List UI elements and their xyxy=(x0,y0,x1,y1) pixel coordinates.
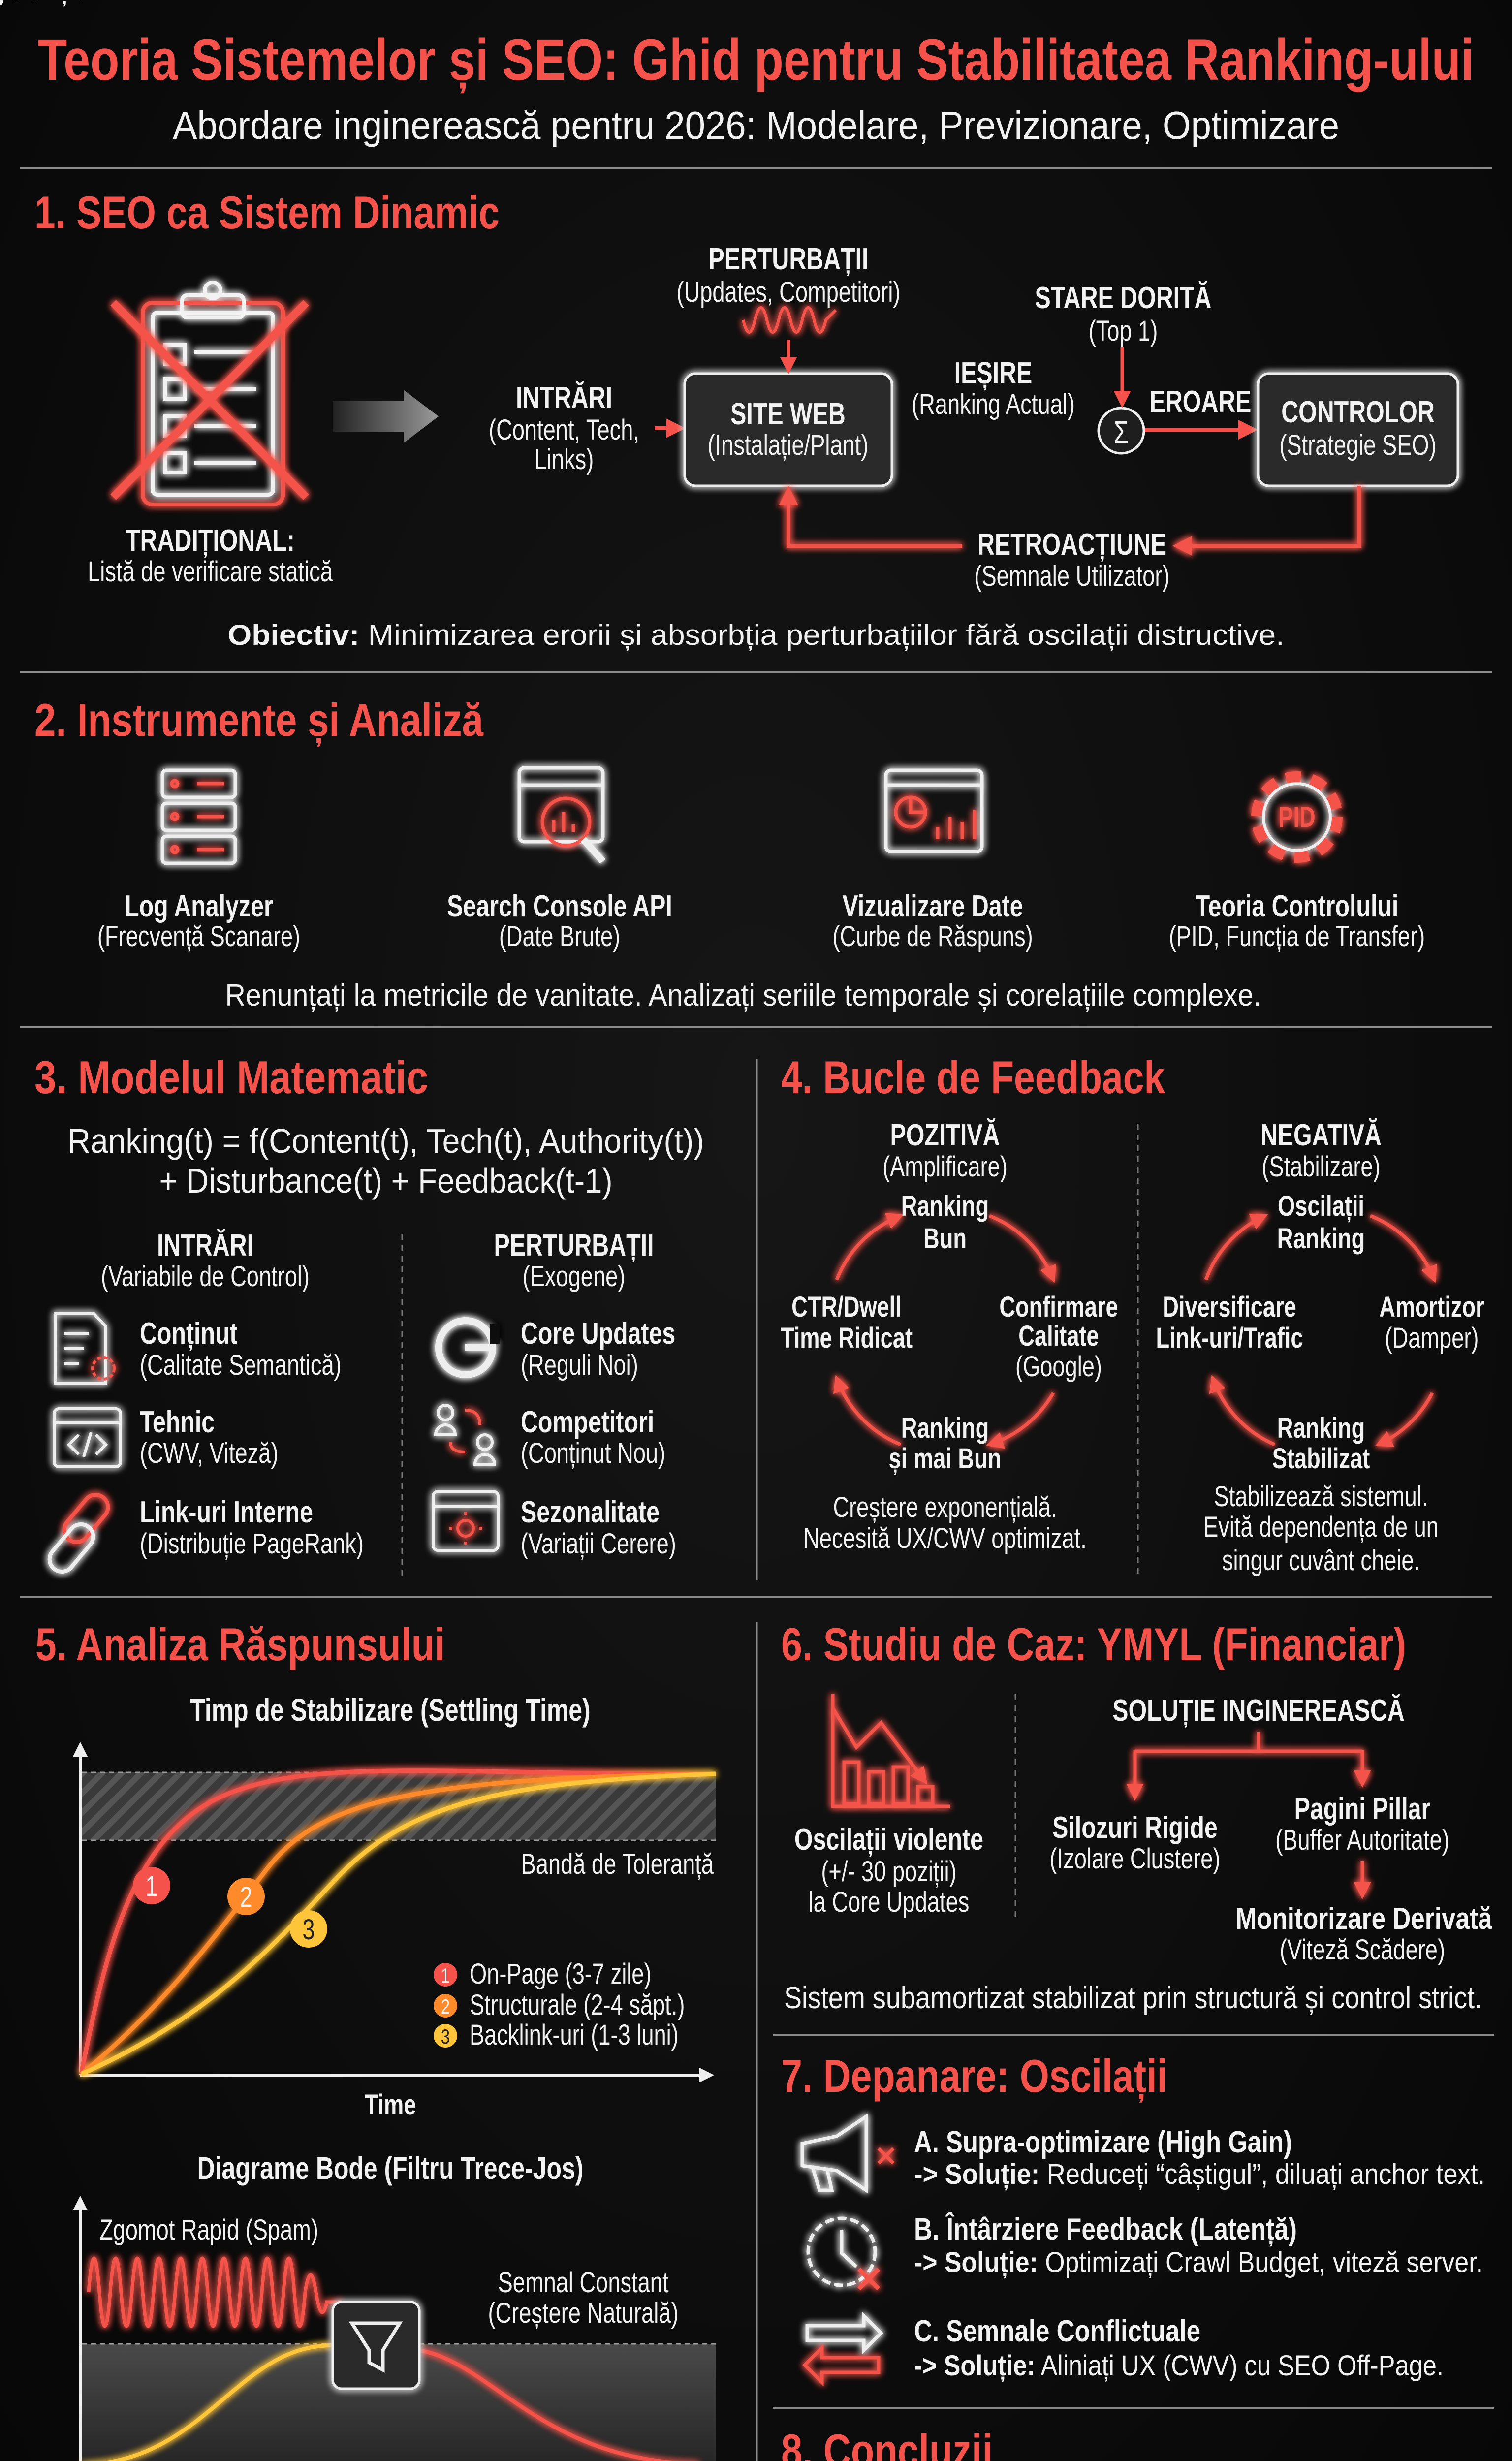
section 2 heading: 2. Instrumente și Analiză xyxy=(34,694,484,747)
panel: case study YMYL: (Viteză Scădere) xyxy=(1280,1934,1445,1966)
chart: bode diagram xyxy=(80,2151,716,2461)
negative loop: (Damper) xyxy=(1385,1323,1479,1354)
inputs column: INTRĂRI xyxy=(157,1228,253,1262)
inputs label: (Content, Tech, xyxy=(489,414,639,446)
negative loop: Stabilizează sistemul. xyxy=(1214,1481,1428,1513)
panel: debugging oscillations: C. Semnale Conflictuale xyxy=(914,2314,1200,2348)
inputs column: Conținut xyxy=(140,1316,238,1351)
positive loop: Creștere exponențială. xyxy=(833,1492,1057,1523)
chart: settling time: Backlink-uri (1-3 luni) xyxy=(470,2019,679,2051)
tool labels: Search Console API xyxy=(447,889,672,923)
feedback path: RETROACȚIUNE xyxy=(977,527,1166,562)
chart: bode diagram: Semnal Constant xyxy=(498,2267,669,2299)
positive loop: Ranking xyxy=(901,1191,989,1222)
positive loop: și mai Bun xyxy=(889,1443,1001,1475)
panel: case study YMYL: Oscilații violente xyxy=(794,1822,983,1857)
label: traditional: Listă de verificare statică xyxy=(88,556,333,588)
chart: settling time: On-Page (3-7 zile) xyxy=(470,1958,652,1990)
chart: settling time: Structurale (2-4 săpt.) xyxy=(470,1989,685,2021)
inputs column: (Variabile de Control) xyxy=(101,1261,310,1293)
inputs column xyxy=(44,1228,364,1577)
positive loop: Necesită UX/CWV optimizat. xyxy=(803,1523,1087,1554)
output: (Ranking Actual) xyxy=(912,389,1075,420)
icon: crossed clipboard xyxy=(113,283,306,505)
chart: settling time: 1 xyxy=(441,1964,450,1987)
disturbances column: Sezonalitate xyxy=(521,1495,660,1529)
box: site web: (Instalație/Plant) xyxy=(708,430,868,461)
panel: case study YMYL xyxy=(781,1618,1492,2015)
chart: settling time: 3 xyxy=(441,2025,450,2048)
label: traditional: TRADIȚIONAL: xyxy=(126,523,295,558)
chart: bode diagram: Diagrame Bode (Filtru Trece-Jos) xyxy=(197,2151,583,2186)
panel: feedback loops xyxy=(781,1051,1484,1578)
desired state: STARE DORITĂ xyxy=(1035,281,1211,315)
sum node xyxy=(1099,408,1144,453)
subtitle: Abordare inginerească pentru 2026: Modelare, Previzionare, Optimizare xyxy=(173,103,1339,147)
positive loop: (Google) xyxy=(1015,1351,1102,1383)
panel: case study YMYL: Pagini Pillar xyxy=(1294,1792,1430,1826)
output xyxy=(892,356,1094,430)
panel: response analysis xyxy=(0,0,716,2461)
diagram: control loop xyxy=(489,242,1458,592)
chart: settling time: 1 xyxy=(145,1871,158,1902)
tool labels: (Date Brute) xyxy=(499,921,620,952)
chart: settling time: Time xyxy=(365,2089,416,2121)
panel: response analysis: 5. Analiza Răspunsului xyxy=(35,1618,445,1670)
arrow: gray transition xyxy=(333,390,439,443)
output: IEȘIRE xyxy=(954,356,1032,390)
box: site web xyxy=(685,374,892,486)
feedback path: (Semnale Utilizator) xyxy=(974,561,1170,592)
panel: case study YMYL: la Core Updates xyxy=(809,1887,969,1918)
inputs column: (Distribuție PageRank) xyxy=(140,1528,364,1560)
inputs column: (CWV, Viteză) xyxy=(140,1438,279,1469)
inputs column: (Calitate Semantică) xyxy=(140,1350,342,1381)
panel: case study YMYL: Silozuri Rigide xyxy=(1052,1810,1218,1844)
objective text: Obiectiv: Minimizarea erorii și absorbția perturbațiilor fără oscilații distructive. xyxy=(227,619,1285,651)
disturbances: (Updates, Competitori) xyxy=(677,277,900,308)
icon: log analyzer xyxy=(162,770,235,863)
tool labels: Log Analyzer xyxy=(125,889,273,923)
chart: settling time: 2 xyxy=(441,1995,450,2018)
positive loop: Time Ridicat xyxy=(781,1323,913,1354)
tool labels: (Frecvență Scanare) xyxy=(97,921,300,952)
panel: debugging oscillations: -> Soluție: Aliniați UX (CWV) cu SEO Off-Page. xyxy=(914,2350,1444,2382)
panel: mathematical model: 3. Modelul Matematic xyxy=(34,1051,428,1103)
tool labels xyxy=(97,889,1425,952)
chart: settling time: 3 xyxy=(302,1914,315,1946)
positive loop: CTR/Dwell xyxy=(791,1292,902,1323)
sum node: Σ xyxy=(1114,415,1129,450)
chart: settling time xyxy=(0,0,716,2121)
negative loop: Evită dependența de un xyxy=(1203,1512,1439,1543)
inputs label xyxy=(489,380,639,475)
box: controller: (Strategie SEO) xyxy=(1279,430,1437,461)
disturbances column: PERTURBAȚII xyxy=(494,1228,654,1262)
negative loop: singur cuvânt cheie. xyxy=(1222,1545,1420,1577)
inputs label: INTRĂRI xyxy=(516,380,612,414)
disturbances column: (Conținut Nou) xyxy=(521,1438,665,1469)
feedback path xyxy=(788,486,1359,592)
disturbances column xyxy=(433,1228,676,1560)
positive loop: Confirmare xyxy=(999,1292,1118,1323)
icon: PID gear: PID xyxy=(1278,802,1316,833)
positive loop: (Amplificare) xyxy=(882,1151,1008,1183)
panel: case study YMYL: SOLUȚIE INGINEREASCĂ xyxy=(1112,1693,1405,1728)
panel: case study YMYL: (+/- 30 poziții) xyxy=(821,1856,957,1888)
panel: case study YMYL: (Buffer Autoritate) xyxy=(1275,1825,1449,1856)
label: traditional xyxy=(88,523,333,588)
panel: feedback loops: 4. Bucle de Feedback xyxy=(781,1051,1166,1103)
panel: mathematical model xyxy=(34,1051,704,1578)
negative loop xyxy=(1156,1118,1484,1577)
inputs column: Tehnic xyxy=(140,1405,215,1439)
chart: settling time: Bandă de Toleranță xyxy=(521,1849,714,1880)
tool labels: (Curbe de Răspuns) xyxy=(832,921,1033,952)
formula: Ranking(t) = f(Content(t), Tech(t), Authority(t)) xyxy=(68,1122,704,1160)
negative loop: Stabilizat xyxy=(1272,1443,1370,1475)
panel: debugging oscillations: B. Întârziere Feedback (Latență) xyxy=(914,2212,1297,2246)
icon: PID gear xyxy=(1257,777,1337,857)
disturbances column: Competitori xyxy=(521,1405,654,1439)
positive loop: Bun xyxy=(923,1223,967,1255)
chart: bode diagram: (Creștere Naturală) xyxy=(488,2298,679,2329)
text: vanity metrics: Renunțați la metricile de vanitate. Analizați seriile temporale și corelațiile complexe. xyxy=(225,978,1261,1012)
desired state xyxy=(1035,281,1211,405)
tool labels: (PID, Funcția de Transfer) xyxy=(1169,921,1425,952)
negative loop: Amortizor xyxy=(1379,1292,1484,1323)
formula xyxy=(68,1122,704,1200)
negative loop: (Stabilizare) xyxy=(1261,1151,1381,1183)
tool labels: Vizualizare Date xyxy=(842,889,1023,923)
positive loop xyxy=(781,1118,1118,1554)
negative loop: Diversificare xyxy=(1163,1292,1296,1323)
disturbances column: Core Updates xyxy=(521,1316,675,1350)
box: controller: CONTROLOR xyxy=(1281,395,1435,429)
panel: case study YMYL: (Izolare Clustere) xyxy=(1050,1843,1220,1875)
chart: settling time: 2 xyxy=(240,1882,252,1913)
error: EROARE xyxy=(1150,384,1251,418)
chart: bode diagram: Zgomot Rapid (Spam) xyxy=(99,2214,318,2246)
box: controller xyxy=(1258,374,1458,486)
panel: debugging oscillations xyxy=(781,2050,1485,2382)
tool labels: Teoria Controlului xyxy=(1196,889,1398,923)
icon: data visualization xyxy=(886,770,982,852)
negative loop: Link-uri/Trafic xyxy=(1156,1323,1303,1354)
section 1 heading: 1. SEO ca Sistem Dinamic xyxy=(34,187,500,238)
negative loop: Oscilații xyxy=(1278,1191,1364,1222)
disturbances xyxy=(677,242,900,371)
inputs label: Links) xyxy=(535,444,594,475)
formula: + Disturbance(t) + Feedback(t-1) xyxy=(159,1162,612,1200)
desired state: (Top 1) xyxy=(1089,316,1158,347)
icon: search console xyxy=(519,768,603,861)
box: site web: SITE WEB xyxy=(730,397,846,431)
positive loop: Calitate xyxy=(1018,1321,1099,1352)
positive loop: POZITIVĂ xyxy=(890,1118,1000,1152)
negative loop: Ranking xyxy=(1277,1223,1365,1255)
disturbances column: (Exogene) xyxy=(523,1261,625,1293)
positive loop: Ranking xyxy=(901,1413,989,1444)
negative loop: NEGATIVĂ xyxy=(1260,1118,1382,1152)
negative loop: Ranking xyxy=(1277,1413,1365,1444)
panel: debugging oscillations: 7. Depanare: Oscilații xyxy=(781,2050,1167,2103)
inputs column: Link-uri Interne xyxy=(140,1495,313,1529)
disturbances column: (Variații Cerere) xyxy=(521,1528,676,1560)
disturbances: PERTURBAȚII xyxy=(709,242,868,276)
disturbances column: (Reguli Noi) xyxy=(521,1350,638,1381)
chart: settling time: Timp de Stabilizare (Settling Time) xyxy=(190,1693,591,1728)
panel: debugging oscillations: A. Supra-optimizare (High Gain) xyxy=(914,2125,1292,2159)
